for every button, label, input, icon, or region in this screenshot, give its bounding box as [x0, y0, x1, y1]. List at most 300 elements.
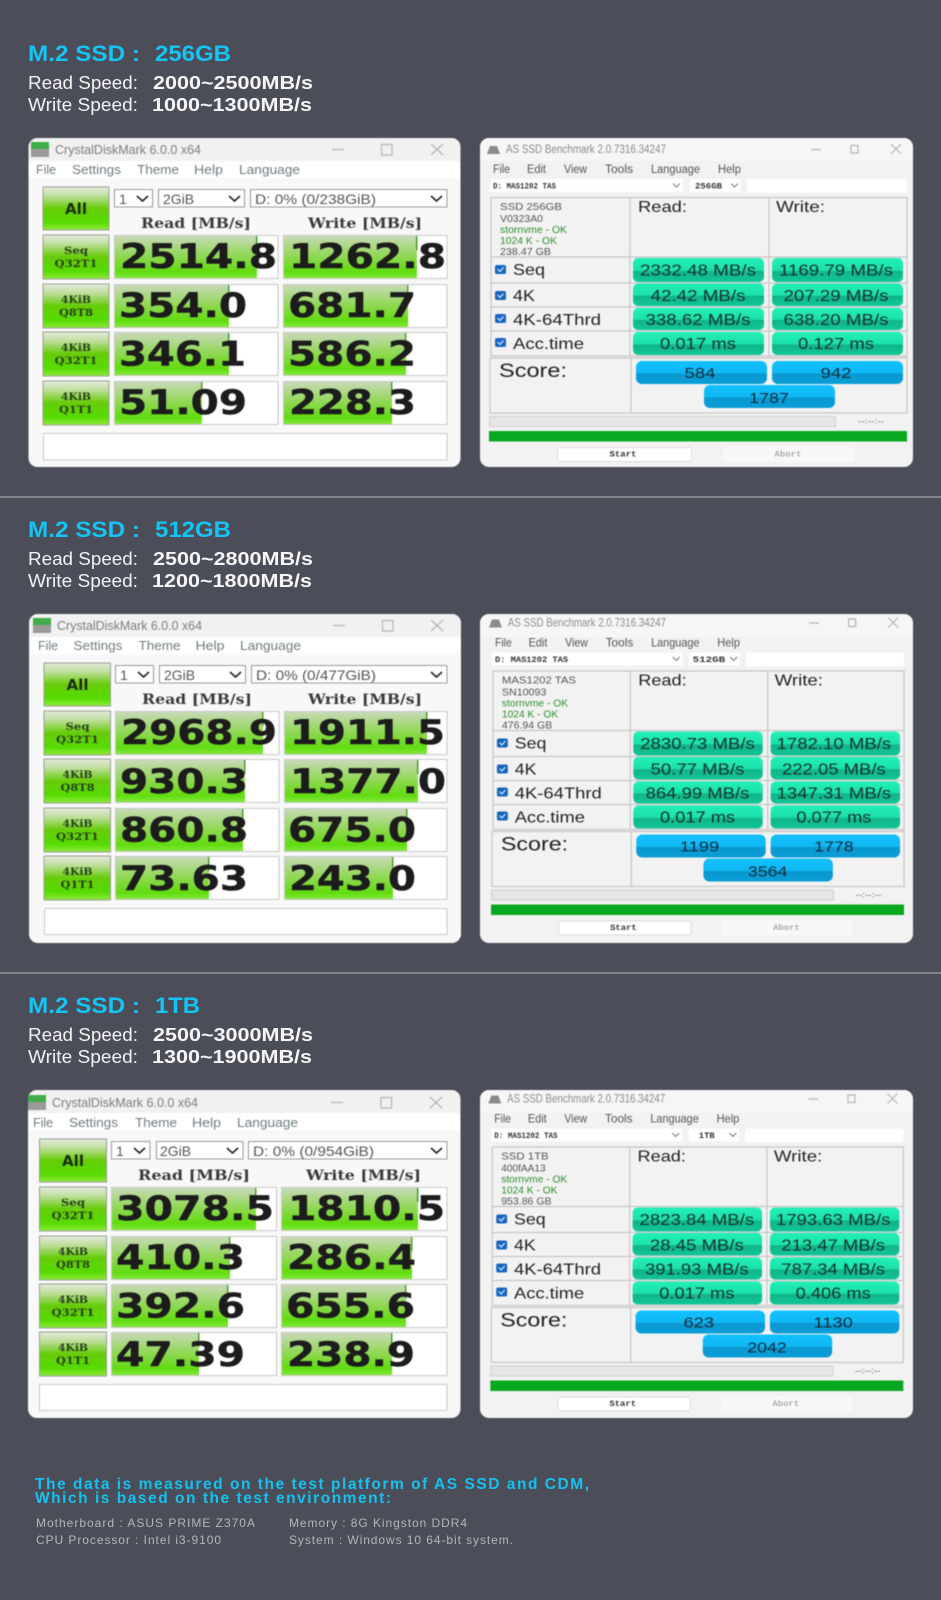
benchmark contents — [489, 617, 904, 936]
results grid — [491, 1147, 903, 1362]
row: 4KiB Q1T1: 238.9 — [287, 1335, 415, 1375]
drive selectors: D: MAS1202 TAS — [493, 182, 556, 192]
row: 4K-64Thrd: 638.20 MB/s — [784, 312, 889, 329]
column headers: Write: — [776, 199, 825, 216]
column headers: Write [MB/s] — [307, 692, 422, 708]
row: 4K: 207.29 MB/s — [784, 288, 889, 305]
row: Acc.time — [497, 806, 900, 828]
column headers: Read [MB/s] — [141, 216, 251, 232]
row: 4KiB Q1T1 — [44, 856, 447, 900]
score block: 1130 — [813, 1315, 853, 1332]
row: 4KiB Q32T1: 860.8 — [120, 810, 248, 850]
column headers — [138, 1168, 421, 1184]
drive info: stornvme - OK — [502, 698, 568, 710]
row: 4K — [497, 757, 900, 780]
panel: CrystalDiskMark 256GB: CrystalDiskMark 6.0.0 x64 — [55, 142, 201, 157]
row: Seq: 1782.10 MB/s — [777, 736, 892, 753]
comment box — [40, 1384, 447, 1410]
row: Acc.time — [495, 332, 903, 355]
row: 4KiB Q32T1: 586.2 — [288, 334, 416, 374]
row: 4KiB Q8T8 — [43, 284, 447, 328]
column headers — [638, 672, 823, 690]
row: Acc.time: 0.017 ms — [659, 1285, 735, 1303]
row: Seq Q32T1: Q32T1 — [54, 258, 98, 270]
column headers: Read: — [638, 1148, 686, 1166]
drive info: 953.86 GB — [501, 1196, 552, 1208]
menu bar: Help — [192, 1115, 221, 1130]
row: 4KiB Q8T8: 4KiB — [61, 294, 91, 306]
menu bar: Edit — [528, 1113, 547, 1126]
footer note heading: Which is based on the test environment: — [35, 1490, 391, 1507]
menu bar: Language — [650, 1113, 699, 1126]
menu bar: Settings — [74, 638, 123, 653]
menu bar — [493, 164, 741, 176]
row: 4K-64Thrd — [497, 782, 900, 804]
score block — [500, 1309, 899, 1358]
row: 4KiB Q32T1: 346.1 — [119, 334, 246, 374]
section heading: 256GB: 2000~2500MB/s — [153, 73, 313, 93]
drive info: 1024 K - OK — [500, 235, 557, 247]
column headers: Read [MB/s] — [138, 1168, 250, 1184]
column headers: Read: — [638, 672, 687, 690]
row: 4KiB Q1T1: 47.39 — [116, 1335, 245, 1375]
row: Acc.time: Acc.time — [513, 336, 584, 353]
drive info: stornvme - OK — [500, 224, 567, 236]
icon: AS SSD — [488, 1096, 501, 1104]
score block: Score: — [500, 1309, 567, 1332]
panel: CrystalDiskMark 256GB — [28, 138, 460, 467]
menu bar: Theme — [137, 162, 179, 177]
drive info: SSD 256GB — [500, 201, 562, 213]
score block: 1199 — [680, 839, 719, 856]
progress bars — [489, 416, 907, 442]
button: All — [44, 663, 110, 706]
row: Seq: Seq — [514, 1211, 546, 1229]
menu bar: Settings — [69, 1115, 119, 1130]
selectors: 2GiB — [163, 191, 194, 207]
section heading: 1TB: Write Speed: — [28, 1047, 138, 1067]
row: 4KiB Q1T1: Q1T1 — [56, 1355, 90, 1367]
row: 4KiB Q1T1: 73.63 — [120, 859, 248, 899]
window controls — [333, 620, 443, 631]
button: All: All — [62, 1152, 84, 1170]
row: 4KiB Q8T8: 1377.0 — [290, 762, 446, 802]
row: 4K-64Thrd — [496, 1258, 899, 1280]
row: 4KiB Q8T8 — [44, 759, 447, 803]
buttons: Start, Abort — [558, 1396, 852, 1412]
selectors: 2GiB — [164, 667, 195, 683]
progress bars — [491, 890, 904, 915]
drive selectors — [490, 179, 907, 193]
progress bars: --:--:-- — [858, 417, 884, 426]
panel: CrystalDiskMark 1TB — [28, 1090, 460, 1418]
row: 4KiB Q32T1 — [44, 808, 447, 852]
menu bar: View — [565, 637, 589, 650]
icon: CrystalDiskMark — [28, 1095, 46, 1110]
row: 4KiB Q1T1: 243.0 — [289, 859, 416, 899]
section heading: 256GB: M.2 SSD : — [28, 41, 140, 66]
row: 4KiB Q8T8: 354.0 — [119, 286, 247, 326]
section heading: 512GB: 512GB — [155, 517, 231, 542]
score block: 2042 — [747, 1340, 787, 1357]
results grid — [490, 198, 907, 413]
row: Seq Q32T1: 1810.5 — [288, 1189, 445, 1229]
icon: CrystalDiskMark — [31, 142, 49, 157]
row: Seq Q32T1: Seq — [64, 245, 89, 257]
drive info: MAS1202 TAS — [502, 675, 576, 687]
row: 4KiB Q1T1: Q1T1 — [60, 879, 94, 891]
column headers: Write [MB/s] — [305, 1168, 421, 1184]
column headers: Write [MB/s] — [307, 216, 422, 232]
score block: 584 — [684, 365, 716, 382]
selectors: 2GiB — [160, 1143, 191, 1159]
row: Seq Q32T1: 2514.8 — [120, 237, 277, 277]
row: 4KiB Q8T8: 4KiB — [62, 769, 93, 781]
row: Seq: 1169.79 MB/s — [779, 262, 893, 280]
menu bar: Help — [717, 1113, 739, 1126]
section heading: 512GB: Read Speed: — [28, 549, 138, 569]
menu bar — [33, 1115, 298, 1130]
column headers — [638, 1148, 822, 1166]
row: Acc.time — [496, 1282, 899, 1304]
score block: Score: — [499, 360, 567, 382]
row: 4K-64Thrd: 391.93 MB/s — [645, 1261, 749, 1279]
selectors: D: 0% (0/954GiB) — [253, 1143, 374, 1159]
row: Seq Q32T1: Q32T1 — [52, 1210, 94, 1222]
row: 4K-64Thrd: 864.99 MB/s — [646, 785, 750, 803]
menu bar: File — [493, 164, 510, 176]
section heading: 256GB: 256GB — [155, 41, 231, 66]
panel: AS SSD 512GB — [480, 614, 913, 943]
row: 4KiB Q1T1: 228.3 — [289, 383, 416, 423]
row: Acc.time: 0.406 ms — [796, 1285, 871, 1303]
selectors: D: 0% (0/477GiB) — [256, 667, 376, 683]
row: 4KiB Q8T8 — [40, 1236, 447, 1280]
row: 4KiB Q8T8: 286.4 — [287, 1238, 416, 1278]
score block: 623 — [683, 1315, 714, 1332]
drive info — [501, 1151, 567, 1208]
row: 4KiB Q32T1 — [40, 1284, 447, 1328]
row: 4KiB Q1T1: Q1T1 — [59, 404, 93, 416]
row: 4KiB Q8T8: 410.3 — [116, 1238, 245, 1278]
row: 4KiB Q1T1: 4KiB — [61, 391, 91, 403]
row: Seq Q32T1: Q32T1 — [56, 734, 99, 746]
row: 4K: 222.05 MB/s — [782, 761, 886, 779]
window controls — [809, 618, 898, 628]
row: 4K-64Thrd — [495, 308, 903, 330]
section heading: 1TB: Read Speed: — [28, 1025, 138, 1045]
menu bar — [495, 637, 740, 650]
row: 4K: 42.42 MB/s — [650, 288, 746, 305]
section heading: 256GB: Read Speed: — [28, 73, 138, 93]
benchmark contents — [487, 144, 907, 462]
menu bar: Theme — [135, 1115, 177, 1130]
section heading: 512GB: Write Speed: — [28, 571, 138, 591]
window controls — [808, 1094, 897, 1104]
drive selectors: D: MAS1202 TAS — [495, 656, 568, 665]
drive info: stornvme - OK — [501, 1174, 567, 1186]
row: 4KiB Q32T1: 392.6 — [116, 1286, 245, 1326]
panel: AS SSD 1TB — [480, 1090, 913, 1418]
row: Seq Q32T1: Seq — [66, 721, 90, 733]
drive info: SN10093 — [502, 687, 547, 699]
row: 4KiB Q1T1 — [40, 1332, 447, 1376]
row: Acc.time: Acc.time — [515, 809, 585, 827]
menu bar: Help — [194, 162, 223, 177]
row: 4KiB Q8T8: 4KiB — [58, 1246, 88, 1258]
comment box — [44, 434, 447, 460]
drive info: SSD 1TB — [501, 1151, 549, 1163]
row: Acc.time: 0.127 ms — [798, 336, 874, 353]
section heading: 512GB: 2500~2800MB/s — [153, 549, 313, 569]
column headers: Write: — [775, 672, 823, 690]
section heading: 256GB: 1000~1300MB/s — [152, 95, 312, 115]
buttons: Start, Abort: Start — [610, 450, 637, 460]
selectors: 1 — [119, 191, 127, 207]
row: Seq Q32T1 — [43, 235, 447, 279]
menu bar: File — [38, 638, 58, 653]
drive info: 1024 K - OK — [502, 709, 558, 721]
score block: 3564 — [748, 864, 787, 881]
menu bar: File — [33, 1115, 53, 1130]
row: 4K-64Thrd: 4K-64Thrd — [515, 785, 602, 803]
row: 4K-64Thrd: 338.62 MB/s — [646, 312, 751, 329]
button: All — [40, 1139, 106, 1182]
section heading: 256GB — [28, 41, 313, 115]
comment box — [44, 908, 447, 934]
selectors — [112, 1142, 447, 1159]
icon: AS SSD — [489, 620, 502, 628]
menu bar: Edit — [527, 164, 547, 176]
test environment details: System : Windows 10 64-bit system. — [289, 1533, 513, 1547]
section heading: 1TB: M.2 SSD : — [28, 993, 140, 1018]
window controls — [331, 1097, 442, 1108]
menu bar: File — [494, 1113, 511, 1126]
row: 4KiB Q32T1: Q32T1 — [54, 355, 98, 367]
row: Seq: Seq — [515, 735, 546, 753]
column headers: Write: — [774, 1148, 822, 1166]
row: 4K-64Thrd: 4K-64Thrd — [513, 312, 601, 329]
row: Acc.time: Acc.time — [514, 1285, 584, 1303]
row: 4K: 4K — [514, 1237, 536, 1255]
drive selectors: 1TB — [699, 1132, 715, 1141]
menu bar — [494, 1113, 739, 1126]
row: 4KiB Q8T8: Q8T8 — [60, 782, 94, 794]
results grid — [492, 671, 904, 886]
row: 4K-64Thrd: 4K-64Thrd — [514, 1261, 601, 1279]
row: 4K: 4K — [513, 288, 535, 305]
benchmark contents: AS SSD Benchmark 2.0.7316.34247 — [507, 1093, 665, 1106]
panel: AS SSD 256GB — [480, 138, 913, 467]
section heading: 1TB: 2500~3000MB/s — [153, 1025, 313, 1045]
row: 4KiB Q32T1: 4KiB — [62, 818, 93, 830]
benchmark contents — [488, 1093, 903, 1412]
row: 4KiB Q32T1: 4KiB — [58, 1294, 88, 1306]
button: All: All — [66, 676, 88, 694]
score block: Score: — [501, 833, 568, 856]
row: Seq: Seq — [513, 262, 545, 279]
row: Seq Q32T1: 1911.5 — [290, 713, 445, 753]
drive info: V0323A0 — [500, 213, 543, 225]
drive info — [500, 201, 567, 258]
footer note heading — [35, 1476, 589, 1507]
buttons: Start, Abort: Abort — [772, 1400, 799, 1409]
drive selectors: 512GB — [693, 656, 725, 665]
section heading: 1TB — [28, 993, 313, 1067]
buttons: Start, Abort — [558, 447, 855, 462]
score block — [499, 360, 903, 408]
menu bar: Edit — [529, 637, 548, 650]
menu bar: File — [495, 637, 512, 650]
row: Seq: 1793.63 MB/s — [776, 1212, 891, 1229]
menu bar: Language — [651, 637, 700, 650]
row: Seq — [496, 1208, 899, 1232]
menu bar: Tools — [606, 637, 634, 650]
row: Seq Q32T1: 1262.8 — [289, 237, 446, 277]
button: All — [43, 187, 109, 230]
drive selectors — [492, 652, 904, 666]
column headers — [142, 692, 422, 708]
column headers: Read [MB/s] — [142, 692, 252, 708]
buttons: Start, Abort: Start — [609, 1400, 636, 1409]
menu bar: Help — [196, 638, 224, 653]
row: 4KiB Q8T8: Q8T8 — [56, 1259, 90, 1271]
drive selectors — [491, 1128, 903, 1142]
score block: 942 — [820, 365, 852, 382]
column headers — [638, 199, 825, 216]
row: Seq Q32T1 — [44, 711, 447, 755]
row: 4KiB Q1T1: 4KiB — [58, 1342, 88, 1354]
menu bar: View — [564, 164, 588, 176]
row: 4KiB Q1T1 — [43, 381, 447, 425]
menu bar: Tools — [605, 164, 633, 176]
row: 4K: 4K — [515, 761, 537, 779]
row: 4K-64Thrd: 1347.31 MB/s — [777, 785, 892, 803]
panel: CrystalDiskMark 512GB: CrystalDiskMark 6.0.0 x64 — [57, 618, 202, 633]
row: 4K: 213.47 MB/s — [781, 1237, 885, 1255]
menu bar — [36, 162, 300, 177]
score block: 1787 — [749, 390, 789, 407]
section heading: 512GB: 1200~1800MB/s — [152, 571, 312, 591]
score block — [501, 833, 900, 882]
menu bar: File — [36, 162, 56, 177]
menu bar: Settings — [72, 162, 122, 177]
test environment details: Motherboard : ASUS PRIME Z370A — [36, 1516, 255, 1530]
footer note heading: The data is measured on the test platform of AS SSD and CDM, — [35, 1476, 589, 1493]
row: 4KiB Q32T1: 4KiB — [61, 342, 91, 354]
row: Seq: 2830.73 MB/s — [640, 736, 755, 753]
row: 4KiB Q32T1: 675.0 — [288, 810, 416, 850]
menu bar: Language — [237, 1115, 298, 1130]
row: 4KiB Q1T1: 51.09 — [119, 383, 247, 423]
progress bars: --:--:-- — [856, 890, 882, 900]
buttons: Start, Abort: Abort — [773, 924, 800, 933]
progress bars — [490, 1366, 903, 1391]
score block: 1778 — [814, 839, 854, 856]
drive info: 400fAA13 — [501, 1163, 546, 1175]
drive selectors: 256GB — [695, 182, 722, 192]
row: 4K — [496, 1233, 899, 1256]
drive selectors: D: MAS1202 TAS — [494, 1132, 558, 1141]
buttons: Start, Abort: Start — [610, 924, 637, 933]
row: 4K: 50.77 MB/s — [651, 761, 745, 779]
row: 4KiB Q8T8: 930.3 — [120, 762, 248, 802]
row: Seq: 2823.84 MB/s — [640, 1212, 754, 1229]
selectors — [116, 666, 447, 683]
row: Seq: 2332.48 MB/s — [640, 262, 756, 280]
row: 4KiB Q32T1 — [43, 332, 447, 376]
test environment details: CPU Processor : Intel i3-9100 — [36, 1533, 221, 1547]
column headers: Read: — [638, 199, 687, 216]
menu bar: Language — [239, 162, 300, 177]
icon: CrystalDiskMark — [33, 618, 51, 633]
row: Acc.time: 0.077 ms — [796, 809, 872, 827]
section heading: 512GB — [28, 517, 313, 591]
row: Seq — [497, 732, 900, 756]
row: 4KiB Q32T1: Q32T1 — [56, 831, 99, 843]
row: 4K: 28.45 MB/s — [650, 1237, 744, 1255]
section heading: 512GB: M.2 SSD : — [28, 517, 140, 542]
row: 4K — [495, 284, 903, 306]
row: Seq Q32T1: Seq — [61, 1197, 86, 1209]
row: Seq Q32T1: 3078.5 — [116, 1189, 274, 1229]
drive info: 238.47 GB — [500, 246, 551, 258]
drive info — [502, 675, 576, 732]
drive info: 476.94 GB — [502, 720, 552, 732]
section heading: 1TB: 1300~1900MB/s — [152, 1047, 312, 1067]
panel: CrystalDiskMark 1TB: CrystalDiskMark 6.0.0 x64 — [52, 1095, 198, 1110]
row: 4KiB Q32T1: Q32T1 — [52, 1307, 94, 1319]
selectors — [114, 190, 447, 207]
row: Acc.time: 0.017 ms — [660, 809, 735, 827]
panel: CrystalDiskMark 512GB — [29, 614, 461, 943]
selectors: 1 — [116, 1143, 124, 1159]
row: 4K-64Thrd: 787.34 MB/s — [781, 1261, 885, 1279]
menu bar: Language — [240, 638, 301, 653]
drive info: 1024 K - OK — [501, 1185, 558, 1197]
menu bar: Tools — [605, 1113, 633, 1126]
row: 4KiB Q32T1: 655.6 — [286, 1286, 415, 1326]
column headers — [141, 216, 422, 232]
window controls — [811, 144, 901, 154]
menu bar: Help — [718, 164, 741, 176]
button: All: All — [65, 200, 87, 218]
row: 4KiB Q8T8: 681.7 — [288, 286, 416, 326]
menu bar: Language — [651, 164, 700, 176]
menu bar — [38, 638, 301, 653]
test environment details — [36, 1516, 513, 1547]
window controls — [332, 144, 443, 155]
test environment details: Memory : 8G Kingston DDR4 — [289, 1516, 467, 1530]
section heading: 1TB: 1TB — [155, 993, 200, 1018]
selectors: 1 — [120, 667, 128, 683]
row: Seq Q32T1: 2968.9 — [121, 713, 277, 753]
row: Seq Q32T1 — [40, 1187, 447, 1231]
menu bar: Help — [717, 637, 740, 650]
benchmark contents: AS SSD Benchmark 2.0.7316.34247 — [506, 144, 666, 156]
icon: AS SSD — [487, 146, 500, 154]
buttons: Start, Abort — [559, 920, 853, 936]
row: 4KiB Q8T8: Q8T8 — [59, 307, 93, 319]
row: 4KiB Q1T1: 4KiB — [62, 866, 93, 878]
progress bars: --:--:-- — [855, 1366, 881, 1376]
row: Acc.time: 0.017 ms — [660, 336, 736, 353]
menu bar: View — [564, 1113, 588, 1126]
buttons: Start, Abort: Abort — [774, 450, 802, 460]
menu bar: Theme — [138, 638, 180, 653]
benchmark contents: AS SSD Benchmark 2.0.7316.34247 — [508, 617, 666, 630]
selectors: D: 0% (0/238GiB) — [255, 191, 376, 207]
